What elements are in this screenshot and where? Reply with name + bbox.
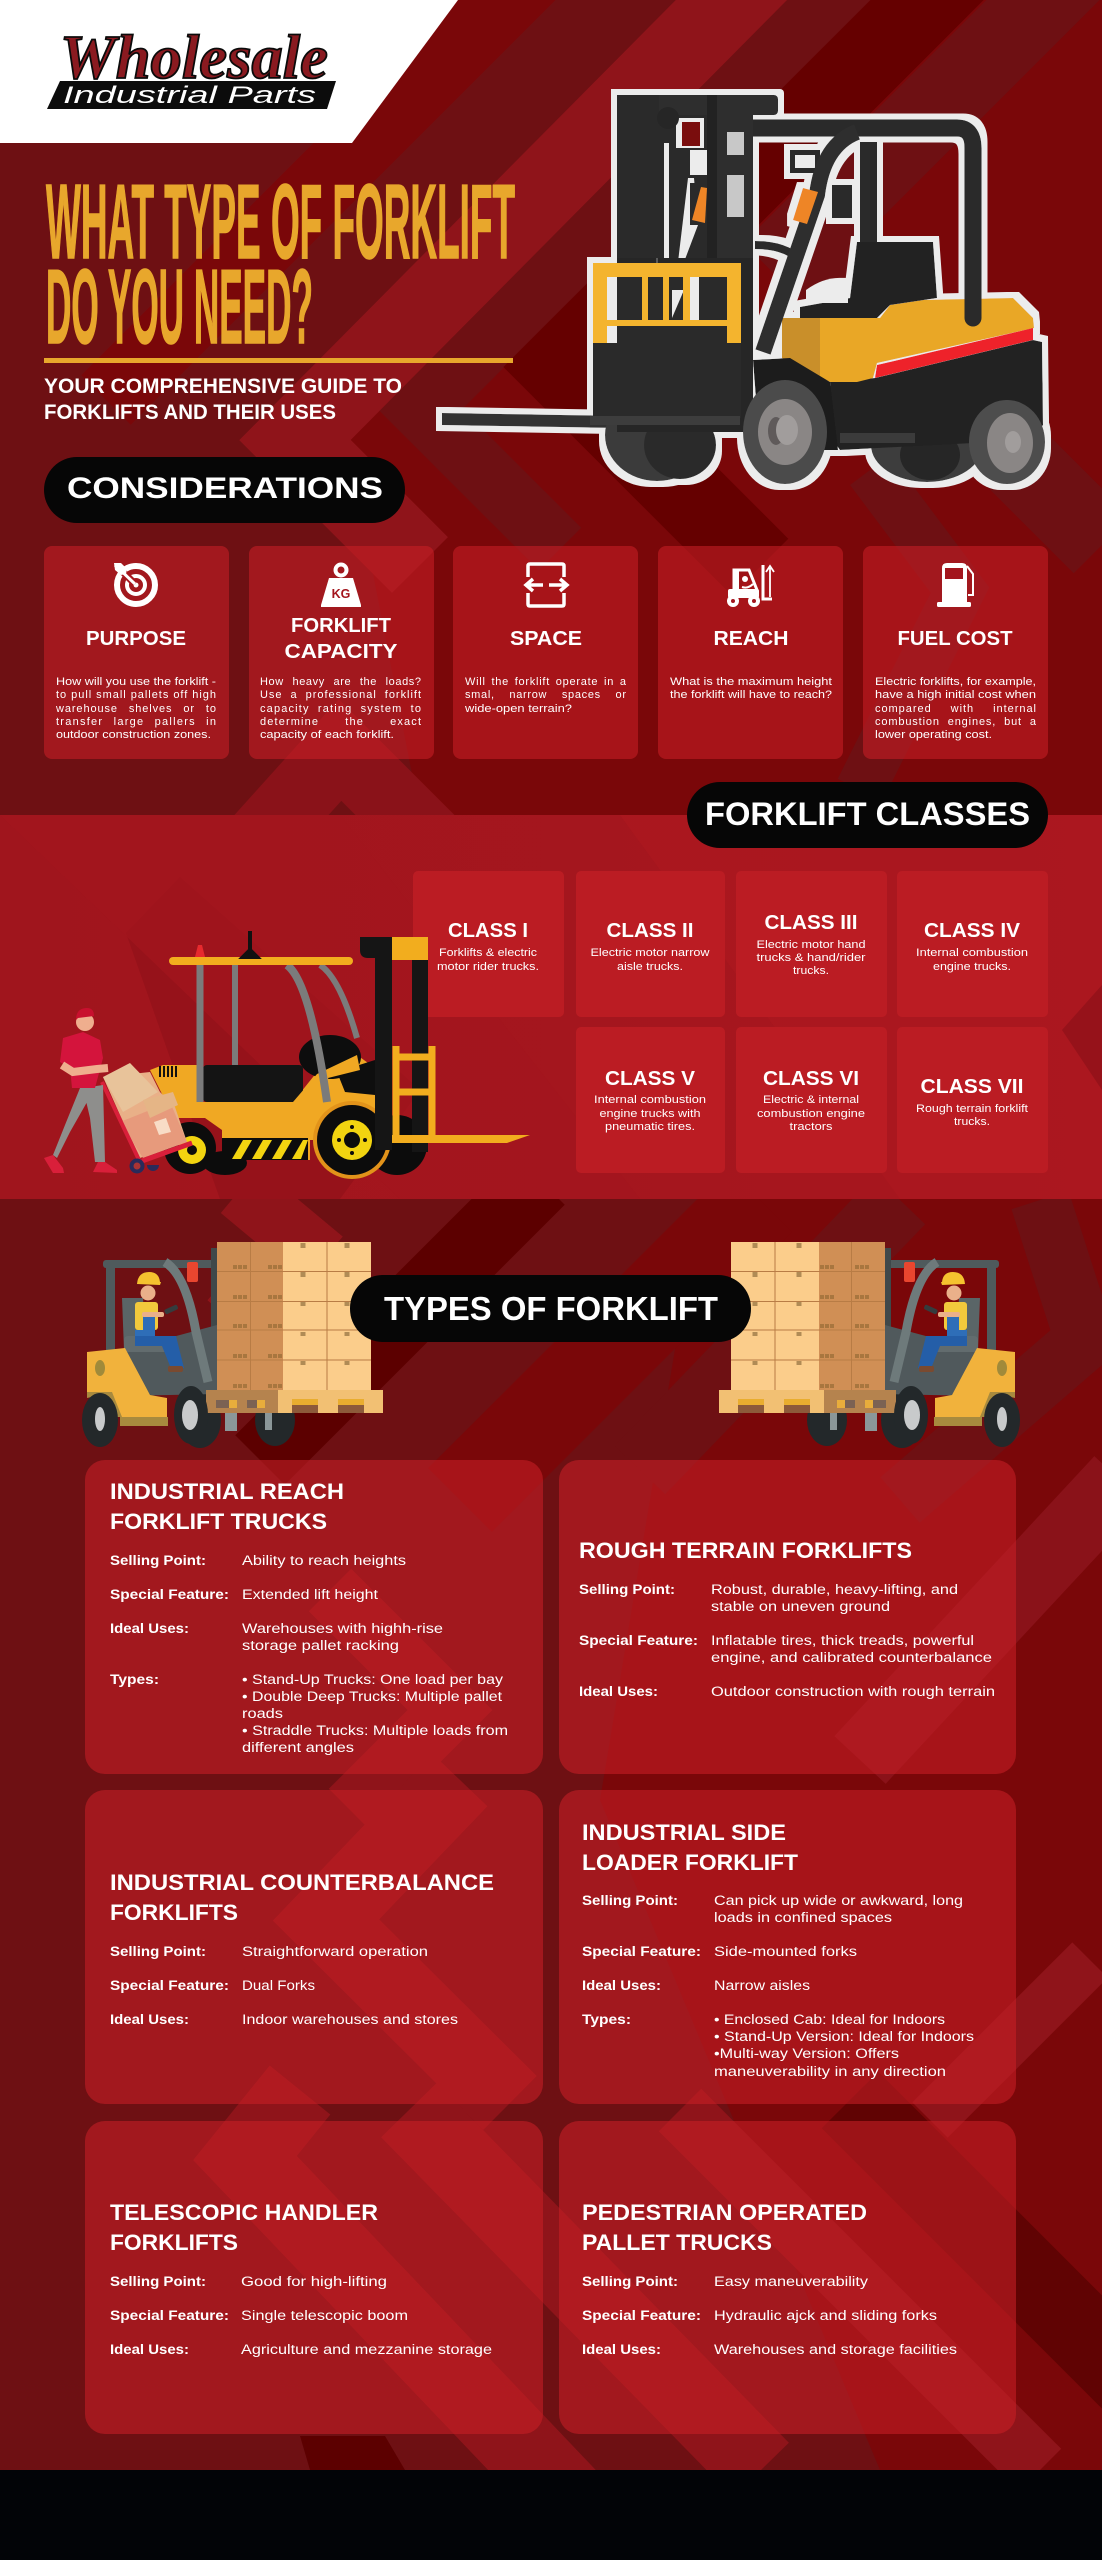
icon: kg weight: KG	[332, 587, 350, 601]
card: class I: motor rider trucks.	[437, 961, 539, 973]
logo: Industrial Parts	[63, 82, 316, 109]
card: class III: trucks.	[793, 965, 829, 977]
heading: CAPACITY	[284, 641, 398, 663]
text block: capacity of each forklift.	[260, 729, 394, 741]
heading: INDUSTRIAL COUNTERBALANCE	[110, 1870, 494, 1895]
text block: Types:	[582, 2012, 631, 2027]
text block: • Stand-Up Version: Ideal for Indoors	[714, 2029, 974, 2044]
title	[46, 163, 515, 366]
text block: • Straddle Trucks: Multiple loads from	[242, 1723, 508, 1738]
text block: Electric forklifts, for example,	[875, 676, 1036, 688]
class cards	[413, 871, 1048, 1173]
text block: Single telescopic boom	[241, 2308, 408, 2323]
card: class VII	[897, 1027, 1048, 1173]
text block: Selling Point:	[110, 1553, 206, 1568]
text block	[875, 676, 1037, 741]
heading: SPACE	[510, 628, 582, 650]
card: class V: CLASS V	[605, 1068, 696, 1090]
icon: fuel pump	[937, 563, 973, 607]
card: class I	[413, 871, 564, 1017]
text block: • Enclosed Cab: Ideal for Indoors	[714, 2012, 945, 2027]
heading: FUEL COST	[898, 628, 1012, 650]
text block: Special Feature:	[579, 1633, 698, 1648]
text block: Ideal Uses:	[582, 2342, 661, 2357]
panel: fuel cost	[863, 546, 1048, 759]
text block: stable on uneven ground	[711, 1599, 890, 1614]
text block: engine, and calibrated counterbalance	[711, 1650, 992, 1665]
text block: have a high initial cost when	[875, 689, 1036, 701]
logo: Wholesale	[60, 24, 328, 92]
panel: industrial counterbalance forklifts	[85, 1790, 543, 2104]
text block: Inflatable tires, thick treads, powerful	[711, 1633, 974, 1648]
text block: wide-open terrain?	[464, 703, 572, 715]
panel: forklift capacity	[249, 546, 434, 759]
card: class VI: combustion engine	[757, 1108, 865, 1120]
text block: • Stand-Up Trucks: One load per bay	[242, 1672, 503, 1687]
text block: What is the maximum height	[670, 676, 832, 688]
text block: Special Feature:	[110, 2308, 229, 2323]
text block: • Double Deep Trucks: Multiple pallet	[242, 1689, 502, 1704]
text block	[55, 676, 216, 741]
text block: Hydraulic ajck and sliding forks	[714, 2308, 937, 2323]
text block: Warehouses with highh-rise	[242, 1621, 443, 1636]
card: class I: Forklifts & electric	[439, 947, 538, 959]
text block: Ideal Uses:	[579, 1684, 658, 1699]
card: class II: Electric motor narrow	[590, 947, 710, 959]
title: DO YOU NEED?	[46, 248, 313, 366]
card: class II	[576, 871, 725, 1017]
illustration: hero forklift	[442, 95, 1045, 484]
icon: space arrows	[526, 564, 567, 606]
card: class V	[576, 1027, 725, 1173]
text block: Straightforward operation	[242, 1944, 428, 1959]
text block: compared with internal	[875, 703, 1036, 715]
panel: purpose	[44, 546, 229, 759]
text block: How heavy are the loads?	[260, 676, 421, 688]
heading: TELESCOPIC HANDLER	[110, 2200, 378, 2225]
icon: forklift reach	[727, 565, 774, 607]
text block: Easy maneuverability	[714, 2274, 868, 2289]
text block: Selling Point:	[110, 1944, 206, 1959]
heading: FORKLIFT TRUCKS	[110, 1509, 327, 1534]
text block: Selling Point:	[579, 1582, 675, 1597]
text block: Indoor warehouses and stores	[242, 2012, 458, 2027]
text block: Agriculture and mezzanine storage	[241, 2342, 492, 2357]
text block: Use a professional forklift	[260, 689, 421, 701]
text block: Special Feature:	[582, 1944, 701, 1959]
text block: Can pick up wide or awkward, long	[714, 1893, 963, 1908]
subtitle: FORKLIFTS AND THEIR USES	[44, 401, 336, 424]
text block: How will you use the forklift -	[56, 676, 216, 688]
heading: PALLET TRUCKS	[582, 2230, 772, 2255]
text block: Outdoor construction with rough terrain	[711, 1684, 995, 1699]
text block: Selling Point:	[110, 2274, 206, 2289]
heading: INDUSTRIAL SIDE	[582, 1820, 786, 1845]
card: class V: Internal combustion	[594, 1094, 706, 1106]
panel: telescopic handler forklifts	[85, 2121, 543, 2434]
heading: ROUGH TERRAIN FORKLIFTS	[579, 1538, 912, 1563]
illustration: yellow forklift with worker	[44, 931, 530, 1179]
heading: INDUSTRIAL REACH	[110, 1479, 344, 1504]
pill heading: considerations	[44, 457, 405, 523]
card: class VII: CLASS VII	[920, 1076, 1024, 1098]
card: class V: engine trucks with	[600, 1108, 700, 1120]
card: class VI: CLASS VI	[763, 1068, 859, 1090]
text block: lower operating cost.	[875, 729, 992, 741]
text block: Ability to reach heights	[242, 1553, 406, 1568]
heading: FORKLIFTS	[110, 1900, 238, 1925]
text block: Ideal Uses:	[110, 2342, 189, 2357]
text block: warehouse shelves or to	[55, 703, 216, 715]
text block: combustion engines, but a	[875, 716, 1037, 728]
panel: rough terrain forklifts	[559, 1460, 1016, 1774]
text block: Special Feature:	[110, 1978, 229, 1993]
text block: to pull small pallets off high	[56, 689, 216, 701]
card: class VII: trucks.	[954, 1116, 990, 1128]
text block	[464, 676, 627, 715]
text block	[670, 676, 832, 701]
text block: Types:	[110, 1672, 159, 1687]
text block: transfer large pallers in	[56, 716, 216, 728]
heading	[110, 1479, 344, 1534]
text block	[579, 1582, 995, 1699]
pill heading: types of forklift: TYPES OF FORKLIFT	[384, 1290, 718, 1327]
panel: pedestrian operated pallet trucks	[559, 2121, 1016, 2434]
pill heading: considerations: CONSIDERATIONS	[67, 472, 383, 505]
text block: outdoor construction zones.	[56, 729, 211, 741]
subtitle	[44, 375, 402, 424]
heading	[110, 1870, 494, 1925]
heading	[110, 2200, 378, 2255]
card: class II: aisle trucks.	[617, 961, 683, 973]
subtitle: YOUR COMPREHENSIVE GUIDE TO	[44, 375, 402, 398]
text block: Narrow aisles	[714, 1978, 810, 1993]
background: dark red chevrons	[82, 0, 1102, 815]
card: class III	[736, 871, 887, 1017]
text block: Selling Point:	[582, 2274, 678, 2289]
panel: space	[453, 546, 638, 759]
illustration: left forklift with pallet	[82, 1242, 383, 1448]
text block: •Multi-way Version: Offers	[714, 2046, 899, 2061]
card: class IV: Internal combustion	[916, 947, 1028, 959]
card: class V: pneumatic tires.	[605, 1121, 695, 1133]
card: class IV: CLASS IV	[924, 920, 1021, 942]
heading: PURPOSE	[86, 628, 186, 650]
title rule	[44, 358, 513, 363]
text block: maneuverability in any direction	[714, 2064, 946, 2079]
worker and hand truck	[44, 1008, 192, 1173]
text block: Special Feature:	[110, 1587, 229, 1602]
card: class III: trucks & hand/rider	[756, 952, 866, 964]
heading	[284, 615, 398, 663]
heading	[582, 1820, 798, 1875]
card: class VI: Electric & internal	[763, 1094, 859, 1106]
heading	[582, 2200, 867, 2255]
text block: storage pallet racking	[242, 1638, 399, 1653]
icon: target	[114, 563, 155, 604]
text block: Ideal Uses:	[110, 2012, 189, 2027]
text block	[110, 2274, 492, 2357]
card: class VI	[736, 1027, 887, 1173]
text block: Ideal Uses:	[110, 1621, 189, 1636]
card: class III: Electric motor hand	[756, 939, 866, 951]
icon: kg weight	[321, 564, 361, 607]
text block: roads	[242, 1706, 283, 1721]
text block: determine the exact	[260, 716, 421, 728]
heading: LOADER FORKLIFT	[582, 1850, 798, 1875]
panel: industrial reach forklift trucks	[85, 1460, 543, 1774]
text block: Extended lift height	[242, 1587, 378, 1602]
text block: Good for high-lifting	[241, 2274, 387, 2289]
text block	[582, 1893, 974, 2079]
text block: capacity rating system to	[260, 703, 421, 715]
text block: Side-mounted forks	[714, 1944, 857, 1959]
panel: forklift classes band	[0, 815, 1102, 1199]
text block: Dual Forks	[242, 1978, 315, 1993]
text block: Warehouses and storage facilities	[714, 2342, 957, 2357]
text block: Robust, durable, heavy-lifting, and	[711, 1582, 958, 1597]
panel: reach	[658, 546, 843, 759]
text block: loads in confined spaces	[714, 1910, 892, 1925]
card: class I: CLASS I	[448, 920, 528, 942]
text block: Selling Point:	[582, 1893, 678, 1908]
card: class II: CLASS II	[606, 920, 694, 942]
card: class III: CLASS III	[764, 912, 858, 934]
heading: FORKLIFT	[291, 615, 391, 637]
text block: different angles	[242, 1740, 354, 1755]
text block: Ideal Uses:	[582, 1978, 661, 1993]
text block: smal, narrow spaces or	[465, 689, 626, 701]
panel: industrial side loader forklift	[559, 1790, 1016, 2104]
text block	[110, 1553, 508, 1755]
card: class VI: tractors	[790, 1121, 833, 1133]
text block	[260, 676, 421, 741]
text block: the forklift will have to reach?	[670, 689, 832, 701]
pill heading: forklift classes: FORKLIFT CLASSES	[705, 796, 1030, 832]
text block: Special Feature:	[582, 2308, 701, 2323]
pill heading: forklift classes	[687, 782, 1048, 848]
pill heading: types of forklift	[350, 1275, 751, 1342]
text block: Will the forklift operate in a	[465, 676, 627, 688]
card: class IV: engine trucks.	[933, 961, 1011, 973]
text block	[110, 1944, 458, 2027]
heading: REACH	[714, 628, 788, 650]
heading: PEDESTRIAN OPERATED	[582, 2200, 867, 2225]
logo	[0, 0, 458, 143]
text block	[582, 2274, 957, 2357]
card: class IV	[897, 871, 1048, 1017]
illustration: right forklift with pallet	[719, 1242, 1020, 1448]
heading: FORKLIFTS	[110, 2230, 238, 2255]
footer black band	[0, 2470, 1102, 2560]
background: lower chevrons	[230, 1180, 1102, 2510]
card: class VII: Rough terrain forklift	[916, 1103, 1028, 1115]
